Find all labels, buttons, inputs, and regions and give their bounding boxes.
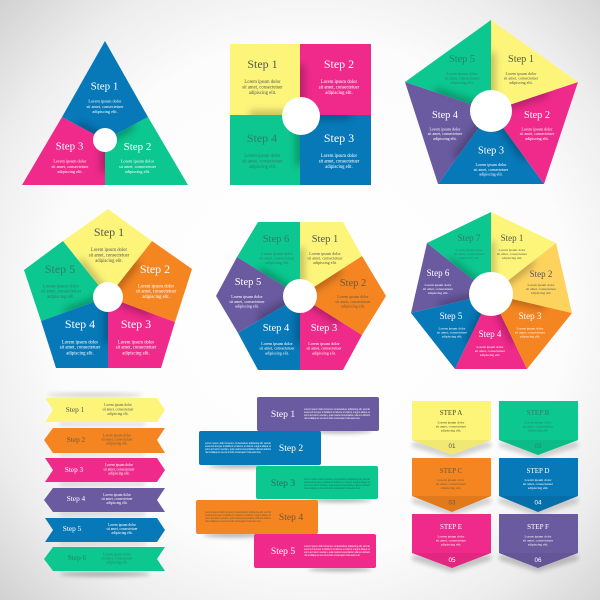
- panel: hexagon diagram: Lorem ipsum dolor: [309, 251, 341, 256]
- bar: step 4: enim ad minim veniam, quis nostrud exercitation ullamco laboris: [205, 516, 272, 520]
- panel: pentagon diagram five spokes to corners: Step 5: [449, 54, 475, 65]
- panel: heptagon diagram: Lorem ipsum dolor: [527, 283, 555, 287]
- panel: pentagon diagram spokes to edges: adipiscing elit.: [95, 259, 123, 264]
- card: step C: STEP C: [440, 467, 463, 475]
- ribbon: step 6: [44, 547, 165, 571]
- panel: pentagon diagram spokes to edges: adipiscing elit.: [66, 352, 94, 356]
- ribbon: step 2: Lorem ipsum dolor: [103, 434, 132, 438]
- card: step B: sit amet, consectetuer: [523, 424, 554, 430]
- card: step A: STEP A: [440, 409, 462, 417]
- panel: triangle diagram: sit amet, consectetuer: [86, 104, 124, 110]
- bar: step 2: nisi ut aliquip ex ea commodo consequat. Duis aute irure: [205, 450, 262, 454]
- card: step E: adipiscing elit.: [441, 542, 461, 546]
- panel: hexagon diagram: Step 1: [312, 234, 338, 245]
- panel: heptagon diagram: adipiscing elit.: [428, 291, 448, 295]
- panel: pentagon diagram spokes to edges: sit amet, consectetuer: [60, 346, 101, 350]
- panel: square diagram: sit amet, consectetuer: [242, 160, 283, 164]
- bar: step 4: Lorem ipsum dolor sit amet, consectetuer adipiscing elit, sed do: [205, 510, 272, 514]
- panel: square diagram: sit amet, consectetuer: [242, 86, 283, 90]
- panel: pentagon diagram five spokes to corners: adipiscing elit.: [525, 136, 549, 141]
- card: step A: [412, 401, 491, 455]
- ribbon: step 5: Step 5: [63, 524, 82, 533]
- panel: heptagon diagram: adipiscing elit.: [502, 256, 522, 260]
- ribbon: step 6: Step 6: [68, 553, 87, 562]
- panel: pentagon diagram five spokes to corners: [405, 20, 578, 184]
- card: step A: Lorem ipsum dolor: [437, 420, 465, 424]
- card: step E: 05: [448, 557, 456, 564]
- panel: hexagon diagram: adipiscing elit.: [312, 350, 336, 356]
- panel: hexagon diagram: [216, 222, 386, 370]
- panel: heptagon diagram: Step 3: [519, 311, 542, 321]
- ribbon: step 4: Lorem ipsum dolor: [103, 493, 132, 497]
- card: step F: 06: [534, 557, 542, 564]
- card: step F: sit amet, consectetuer: [523, 538, 554, 544]
- ribbon: step 2: [44, 428, 165, 453]
- panel: hexagon diagram: adipiscing elit.: [265, 350, 289, 356]
- panel: heptagon diagram: Step 1: [501, 233, 523, 243]
- card: step F: Lorem ipsum dolor: [524, 534, 552, 538]
- panel: hexagon diagram: adipiscing elit.: [341, 304, 365, 308]
- panel: heptagon diagram: Lorem ipsum dolor: [455, 248, 483, 252]
- bar: step 3: Lorem ipsum dolor sit amet, consectetuer adipiscing elit, sed do: [304, 477, 371, 481]
- panel: pentagon diagram spokes to edges: Lorem ipsum dolor: [138, 284, 175, 290]
- card: step D: Lorem ipsum dolor: [524, 478, 552, 482]
- panel: square diagram: sit amet, consectetuer: [319, 160, 360, 164]
- bar: step 5: [254, 534, 376, 568]
- panel: pentagon diagram spokes to edges: adipiscing elit.: [122, 352, 150, 356]
- panel: hexagon diagram: Step 3: [311, 323, 337, 334]
- panel: heptagon diagram: sit amet, consectetuer: [454, 252, 485, 257]
- panel: triangle diagram: sit amet, consectetuer: [119, 164, 157, 170]
- panel: hexagon diagram: adipiscing elit.: [313, 260, 337, 265]
- panel: heptagon diagram: sit amet, consectetuer: [475, 349, 506, 354]
- panel: hexagon diagram: sit amet, consectetuer: [229, 299, 265, 305]
- panel: heptagon diagram: sit amet, consectetuer: [526, 287, 557, 292]
- ribbon: step 1: [45, 398, 165, 422]
- panel: heptagon diagram: Lorem ipsum dolor: [476, 345, 504, 349]
- panel: pentagon diagram five spokes to corners: adipiscing elit.: [433, 136, 457, 141]
- panel: hexagon diagram: Lorem ipsum dolor: [337, 294, 369, 299]
- panel: heptagon diagram: Step 5: [440, 311, 463, 321]
- panel: pentagon diagram spokes to edges: Step 2: [140, 262, 170, 276]
- panel: heptagon diagram: Lorem ipsum dolor: [516, 326, 544, 330]
- panel: pentagon diagram spokes to edges: Lorem ipsum dolor: [43, 284, 80, 290]
- panel: square diagram: adipiscing elit.: [249, 91, 276, 96]
- panel: square diagram: Step 3: [324, 131, 354, 145]
- bar: step 5: nisi ut aliquip ex ea commodo consequat. Duis aute irure: [304, 553, 361, 557]
- panel: pentagon diagram spokes to edges: sit amet, consectetuer: [89, 254, 130, 258]
- panel: triangle diagram: Step 1: [91, 80, 118, 92]
- panel: pentagon diagram five spokes to corners: Step 1: [508, 54, 534, 65]
- panel: heptagon diagram: sit amet, consectetuer: [497, 252, 528, 257]
- card: step E: Lorem ipsum dolor: [437, 534, 465, 538]
- panel: pentagon diagram five spokes to corners: Lorem ipsum dolor: [476, 162, 507, 167]
- ribbon: step 1: Lorem ipsum dolor: [104, 403, 133, 407]
- panel: square diagram: adipiscing elit.: [325, 91, 353, 96]
- panel: hexagon diagram: Step 2: [340, 278, 366, 289]
- bar: step 4: Step 4: [279, 512, 303, 523]
- panel: pentagon diagram five spokes to corners: sit amet, consectetuer: [520, 131, 555, 137]
- ribbon: step 3: Step 3: [65, 465, 84, 474]
- panel: pentagon diagram five spokes to corners: Lorem ipsum dolor: [522, 126, 553, 132]
- panel: pentagon diagram spokes to edges: adipiscing elit.: [142, 295, 170, 300]
- bar: step 5: Step 5: [271, 546, 295, 557]
- ribbon: step 6: sit amet, consectetuer: [101, 556, 133, 562]
- panel: pentagon diagram five spokes to corners: Lorem ipsum dolor: [506, 71, 537, 76]
- bar: step 4: nisi ut aliquip ex ea commodo consequat. Duis aute irure: [205, 519, 262, 523]
- bar: step 1: Step 1: [271, 409, 295, 420]
- panel: hexagon diagram: sit amet, consectetuer: [259, 256, 295, 262]
- card: step F: adipiscing elit.: [528, 542, 548, 546]
- ribbon: step 2: Step 2: [67, 435, 86, 444]
- card: step A: adipiscing elit.: [441, 428, 461, 432]
- panel: triangle diagram: Step 2: [124, 141, 151, 153]
- panel: square diagram: Lorem ipsum dolor: [244, 154, 281, 159]
- bar: step 1: nisi ut aliquip ex ea commodo consequat. Duis aute irure: [304, 416, 361, 420]
- bar: step 2: Lorem ipsum dolor sit amet, consectetuer adipiscing elit, sed do: [205, 441, 272, 445]
- panel: arrow cards: [412, 401, 578, 572]
- panel: pentagon diagram spokes to edges: sit amet, consectetuer: [41, 290, 82, 294]
- bar: step 4: eiusmod tempor incididunt ut labore et dolore magna aliqua ut: [205, 513, 271, 517]
- panel: pentagon diagram spokes to edges: sit amet, consectetuer: [116, 346, 157, 350]
- panel: hexagon diagram: Lorem ipsum dolor: [308, 341, 340, 346]
- card: step E: STEP E: [440, 523, 462, 531]
- bar: step 3: nisi ut aliquip ex ea commodo consequat. Duis aute irure: [304, 486, 361, 490]
- card: step B: STEP B: [527, 409, 550, 417]
- ribbon: step 4: Step 4: [67, 494, 86, 503]
- panel: hexagon diagram: sit amet, consectetuer: [306, 346, 342, 352]
- bar: step 1: eiusmod tempor incididunt ut labore et dolore magna aliqua ut: [304, 410, 370, 414]
- panel: square diagram: Step 4: [247, 131, 277, 145]
- panel: square diagram: Step 1: [247, 57, 278, 71]
- panel: pentagon diagram spokes to edges: Step 3: [121, 317, 151, 331]
- bar: step 3: eiusmod tempor incididunt ut labore et dolore magna aliqua ut: [304, 480, 370, 484]
- panel: pentagon diagram five spokes to corners: adipiscing elit.: [479, 172, 503, 176]
- ribbon: step 5: Lorem ipsum dolor: [108, 523, 137, 527]
- panel: square diagram: Lorem ipsum dolor: [321, 154, 358, 159]
- panel: pentagon diagram spokes to edges: sit amet, consectetuer: [136, 290, 177, 294]
- panel: hexagon diagram: Lorem ipsum dolor: [261, 341, 293, 346]
- panel: heptagon diagram: adipiscing elit.: [442, 334, 462, 338]
- ribbon: step 5: [45, 518, 165, 542]
- panel: square diagram: adipiscing elit.: [249, 165, 276, 170]
- panel: hexagon diagram: sit amet, consectetuer: [259, 346, 295, 352]
- card: step C: Lorem ipsum dolor: [437, 478, 465, 482]
- card: step E: [412, 514, 491, 568]
- panel: pentagon diagram five spokes to corners: sit amet, consectetuer: [445, 76, 480, 82]
- panel: square diagram: Step 2: [324, 57, 354, 71]
- card: step B: Lorem ipsum dolor: [524, 420, 552, 424]
- card: step C: adipiscing elit.: [441, 486, 461, 490]
- panel: hexagon diagram: adipiscing elit.: [265, 260, 289, 265]
- panel: hexagon diagram: Step 6: [263, 234, 289, 245]
- panel: heptagon diagram: Lorem ipsum dolor: [498, 248, 526, 252]
- bar: step 2: Step 2: [279, 443, 303, 454]
- panel: pentagon diagram spokes to edges: Lorem ipsum dolor: [118, 340, 155, 346]
- panel: pentagon diagram five spokes to corners: sit amet, consectetuer: [504, 76, 539, 82]
- card: step D: [499, 458, 578, 512]
- ribbon: step 1: Step 1: [66, 405, 85, 414]
- panel: pentagon diagram spokes to edges: Lorem ipsum dolor: [91, 248, 128, 253]
- panel: heptagon diagram: Step 4: [479, 329, 502, 339]
- card: step C: 03: [448, 500, 456, 506]
- panel: pentagon diagram five spokes to corners: Lorem ipsum dolor: [430, 126, 461, 132]
- bar: step 1: [257, 397, 379, 431]
- card: step E: sit amet, consectetuer: [436, 538, 467, 544]
- panel: heptagon diagram: sit amet, consectetuer: [515, 330, 546, 336]
- ribbon: step 6: adipiscing elit.: [106, 560, 128, 564]
- ribbon: step 3: adipiscing elit.: [108, 472, 130, 476]
- panel: heptagon diagram: sit amet, consectetuer: [423, 287, 454, 292]
- panel: heptagon diagram: adipiscing elit.: [459, 256, 479, 260]
- panel: pentagon diagram spokes to edges: Lorem ipsum dolor: [62, 340, 99, 346]
- panel: hexagon diagram: sit amet, consectetuer: [335, 299, 371, 305]
- panel: ribbon list: [44, 393, 165, 576]
- ribbon: step 6: Lorem ipsum dolor: [103, 552, 132, 556]
- panel: triangle diagram: Lorem ipsum dolor: [53, 158, 87, 164]
- panel: hexagon diagram: Step 4: [263, 323, 290, 334]
- card: step A: sit amet, consectetuer: [436, 424, 467, 430]
- panel: square diagram: Lorem ipsum dolor: [244, 80, 281, 85]
- panel: heptagon diagram: adipiscing elit.: [520, 334, 540, 338]
- panel: pentagon diagram five spokes to corners: Step 3: [478, 146, 504, 156]
- panel: hexagon diagram: adipiscing elit.: [235, 304, 259, 308]
- card: step A: 01: [448, 443, 456, 450]
- card: step F: STEP F: [527, 523, 549, 531]
- bar: step 1: enim ad minim veniam, quis nostrud exercitation ullamco laboris: [304, 413, 371, 417]
- bar: step 3: enim ad minim veniam, quis nostrud exercitation ullamco laboris: [304, 483, 371, 487]
- panel: pentagon diagram five spokes to corners: Lorem ipsum dolor: [447, 71, 478, 76]
- panel: hexagon diagram: Lorem ipsum dolor: [261, 251, 293, 256]
- panel: heptagon diagram: sit amet, consectetuer: [437, 330, 468, 336]
- card: step D: adipiscing elit.: [528, 486, 548, 490]
- bar: step 2: enim ad minim veniam, quis nostrud exercitation ullamco laboris: [205, 447, 272, 451]
- panel: triangle diagram: sit amet, consectetuer: [51, 164, 89, 170]
- card: step B: adipiscing elit.: [528, 428, 548, 432]
- panel: triangle diagram: [22, 41, 188, 185]
- panel: pentagon diagram five spokes to corners: adipiscing elit.: [450, 80, 474, 85]
- panel: pentagon diagram five spokes to corners: sit amet, consectetuer: [428, 131, 463, 137]
- card: step B: [499, 401, 578, 455]
- panel: pentagon diagram spokes to edges: [24, 209, 192, 368]
- bar: step 5: Lorem ipsum dolor sit amet, consectetuer adipiscing elit, sed do: [304, 544, 371, 548]
- bar: step 1: Lorem ipsum dolor sit amet, consectetuer adipiscing elit, sed do: [304, 407, 371, 411]
- panel: square diagram: Lorem ipsum dolor: [321, 80, 358, 85]
- bar: step 5: enim ad minim veniam, quis nostrud exercitation ullamco laboris: [304, 550, 371, 554]
- card: step D: sit amet, consectetuer: [523, 482, 554, 487]
- ribbon: step 4: [44, 488, 165, 512]
- ribbon: step 3: Lorem ipsum dolor: [105, 463, 134, 467]
- panel: heptagon diagram: [411, 212, 572, 369]
- panel: triangle diagram: adipiscing elit.: [57, 169, 83, 174]
- bar: step 4: [196, 500, 318, 534]
- panel: square diagram: sit amet, consectetuer: [319, 86, 360, 90]
- panel: pentagon diagram spokes to edges: Step 5: [45, 262, 75, 276]
- panel: heptagon diagram: Lorem ipsum dolor: [438, 326, 466, 330]
- ribbon: step 4: sit amet, consectetuer: [101, 497, 133, 502]
- panel: triangle diagram: Lorem ipsum dolor: [88, 98, 122, 104]
- card: step C: [412, 458, 491, 512]
- ribbon: step 1: sit amet, consectetuer: [102, 408, 134, 412]
- panel: heptagon diagram: Step 2: [530, 269, 552, 279]
- card: step F: [499, 514, 578, 568]
- panel: hexagon diagram: Lorem ipsum dolor: [231, 294, 263, 299]
- bar: step 2: [199, 431, 321, 465]
- panel: heptagon diagram: Lorem ipsum dolor: [424, 283, 452, 287]
- panel: triangle diagram: Step 3: [56, 140, 84, 152]
- ribbon: step 2: adipiscing elit.: [106, 442, 128, 446]
- panel: hexagon diagram: Step 5: [235, 277, 261, 288]
- panel: staggered bars: [196, 397, 379, 571]
- card: step D: STEP D: [527, 467, 549, 475]
- ribbon: step 5: adipiscing elit.: [111, 531, 133, 535]
- panel: pentagon diagram spokes to edges: Step 1: [94, 225, 124, 239]
- panel: triangle diagram: adipiscing elit.: [92, 109, 118, 114]
- panel: heptagon diagram: Step 6: [427, 268, 450, 278]
- panel: triangle diagram: Lorem ipsum dolor: [121, 158, 155, 164]
- panel: triangle diagram: adipiscing elit.: [125, 169, 150, 174]
- ribbon: step 5: sit amet, consectetuer: [106, 527, 138, 532]
- ribbon: step 4: adipiscing elit.: [106, 501, 128, 505]
- card: step B: 02: [534, 443, 542, 450]
- card: step C: sit amet, consectetuer: [436, 482, 467, 487]
- panel: pentagon diagram five spokes to corners: Step 2: [524, 110, 550, 121]
- panel: pentagon diagram spokes to edges: adipiscing elit.: [47, 295, 75, 300]
- panel: pentagon diagram five spokes to corners: adipiscing elit.: [509, 80, 533, 85]
- panel: pentagon diagram five spokes to corners: sit amet, consectetuer: [474, 167, 509, 173]
- ribbon: step 2: sit amet, consectetuer: [101, 438, 133, 442]
- ribbon: step 3: [45, 458, 165, 482]
- panel: pentagon diagram spokes to edges: Step 4: [65, 317, 95, 331]
- panel: pentagon diagram five spokes to corners: Step 4: [432, 110, 458, 121]
- bar: step 3: Step 3: [271, 478, 295, 489]
- panel: heptagon diagram: adipiscing elit.: [480, 353, 500, 357]
- panel: heptagon diagram: Step 7: [458, 233, 481, 243]
- bar: step 2: eiusmod tempor incididunt ut labore et dolore magna aliqua ut: [205, 444, 271, 448]
- bar: step 5: eiusmod tempor incididunt ut labore et dolore magna aliqua ut: [304, 547, 370, 551]
- ribbon: step 1: adipiscing elit.: [107, 412, 129, 416]
- panel: hexagon diagram: sit amet, consectetuer: [307, 256, 343, 262]
- panel: square diagram: adipiscing elit.: [325, 165, 353, 170]
- card: step D: 04: [534, 500, 542, 506]
- ribbon: step 3: sit amet, consectetuer: [103, 468, 135, 472]
- bar: step 3: [256, 466, 378, 499]
- panel: heptagon diagram: adipiscing elit.: [531, 291, 551, 295]
- panel: square diagram: [230, 44, 371, 185]
